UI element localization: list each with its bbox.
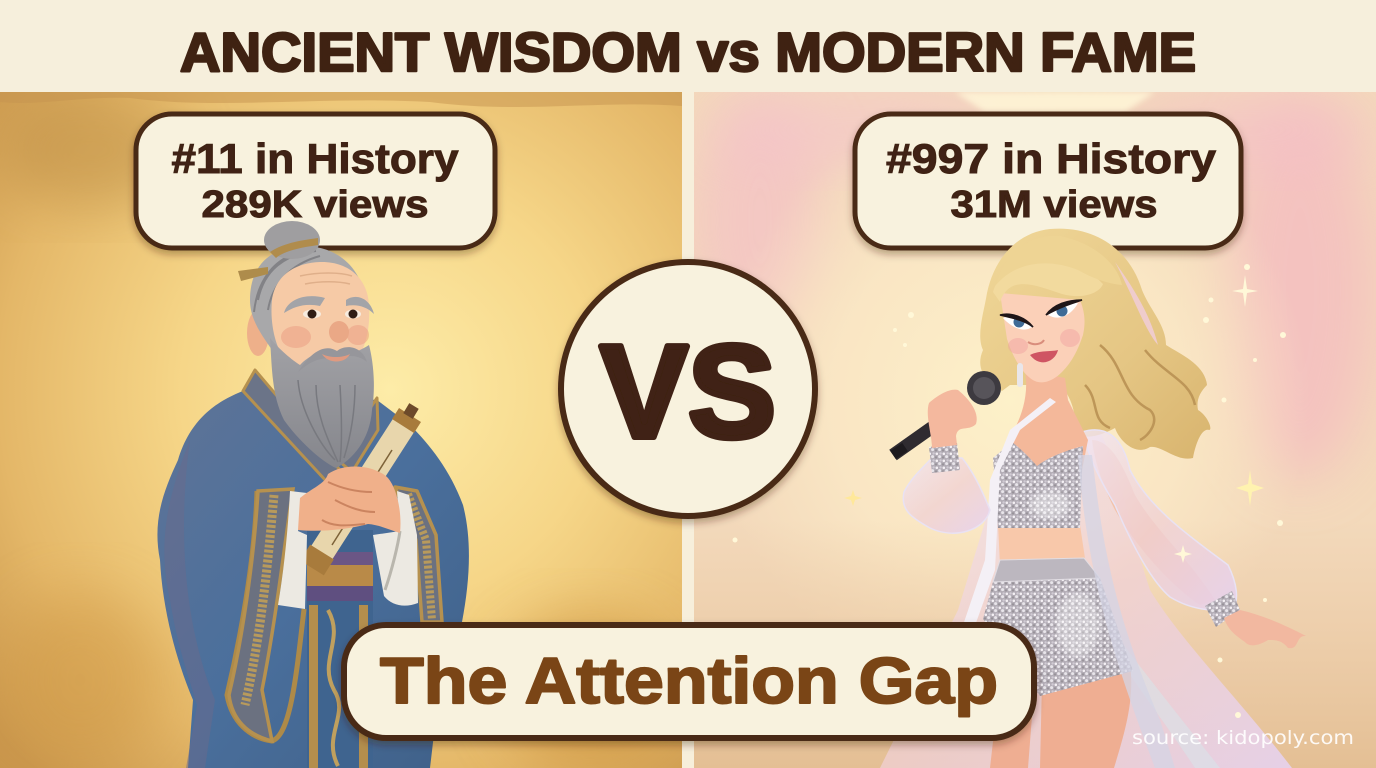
neck and chest: [998, 370, 1088, 470]
left views: 289K views: [202, 184, 428, 226]
sleeve trim left: [227, 489, 304, 741]
right collar: [340, 398, 378, 472]
face: [1000, 293, 1085, 387]
robe: [157, 391, 469, 768]
source credit: source: kidopoly.com: [1132, 727, 1354, 749]
left rank: #11 in History: [172, 135, 459, 182]
shorts: [983, 558, 1133, 696]
leg: [990, 665, 1131, 768]
beard: [270, 338, 374, 468]
sleeve right: [1082, 430, 1236, 610]
trailing hand: [1224, 610, 1306, 648]
bangs: [993, 258, 1103, 302]
sleeve trim right: [395, 487, 442, 622]
right views: 31M views: [950, 184, 1158, 226]
panel: ancient wisdom background: [0, 92, 682, 768]
left collar: [243, 370, 340, 482]
scroll: [312, 406, 414, 568]
wrist cuffs: [929, 443, 1240, 627]
coat train: [880, 432, 1292, 768]
microphone: [893, 371, 1001, 455]
callout: left stats: [136, 114, 495, 248]
right rank: #997 in History: [886, 135, 1217, 182]
arm inside sleeve: [1092, 440, 1215, 605]
coat lapels: [958, 398, 1056, 645]
figure: pop star: [880, 229, 1306, 768]
holding hand: [928, 390, 977, 448]
title band: [0, 0, 1376, 92]
eyebrows: [284, 296, 374, 314]
nose: [1028, 340, 1044, 344]
ear: [247, 314, 268, 356]
vs text: VS: [600, 318, 776, 465]
banner text: The Attention Gap: [380, 644, 998, 717]
figure: ancient philosopher: [157, 221, 469, 768]
callout: right stats: [855, 114, 1241, 248]
white cuffs: [278, 491, 418, 609]
sleeve left: [903, 458, 990, 533]
vs badge: [561, 262, 815, 516]
earring: [1017, 363, 1023, 387]
hair back: [980, 229, 1210, 459]
inner robe and belt: [307, 530, 373, 768]
banner: the attention gap: [344, 625, 1034, 738]
hair: [238, 221, 366, 350]
sequin top: [993, 442, 1083, 528]
lips: [1030, 350, 1058, 362]
midriff: [998, 525, 1086, 565]
panel: modern fame background: [694, 92, 1376, 768]
eyes: [1003, 303, 1078, 330]
sparkles: [732, 264, 1286, 718]
title: ANCIENT WISDOM vs MODERN FAME: [180, 21, 1196, 83]
divider: [682, 92, 694, 768]
eyes: [303, 310, 361, 318]
face: [271, 262, 374, 375]
hands: [298, 466, 400, 533]
